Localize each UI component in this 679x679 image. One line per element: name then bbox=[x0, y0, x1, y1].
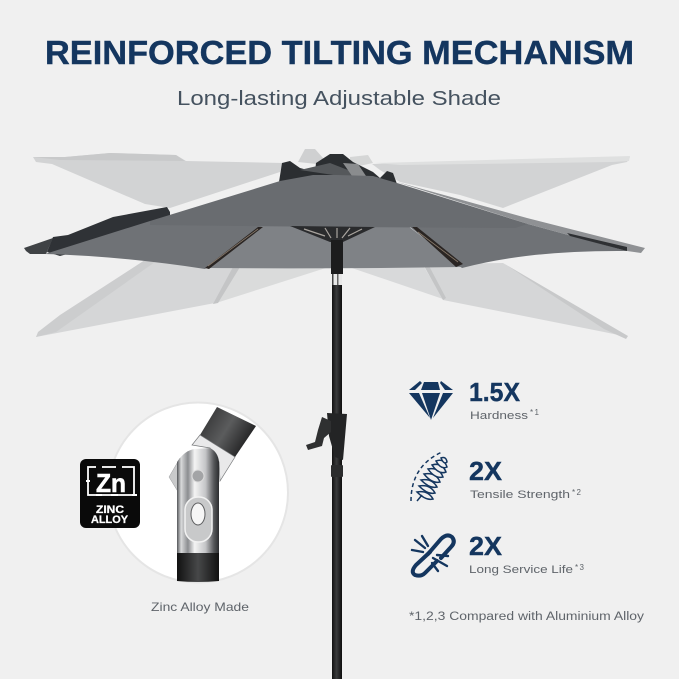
canopy top face bbox=[150, 175, 528, 228]
left panel bbox=[45, 221, 262, 269]
joint upper tube bbox=[200, 407, 256, 457]
stat: long service life: Long Service Life bbox=[469, 564, 573, 576]
stat: hardness bbox=[469, 377, 540, 422]
ghost canopy: tilted up bbox=[33, 149, 630, 208]
underside centre panel bbox=[205, 226, 462, 268]
stat: tensile strength: Tensile Strength bbox=[470, 489, 570, 501]
centre fan bbox=[290, 226, 375, 242]
zinc alloy badge bbox=[80, 459, 140, 528]
left tip bbox=[24, 238, 53, 254]
zinc alloy detail bbox=[108, 402, 288, 582]
stat: long service life bbox=[469, 531, 585, 576]
stat: long service life: *3 bbox=[575, 563, 585, 572]
zinc alloy badge: ZINC bbox=[96, 504, 124, 516]
right panel bbox=[410, 224, 627, 268]
stat: tensile strength: 2X bbox=[469, 456, 503, 486]
stat: hardness: *1 bbox=[530, 408, 540, 417]
joint bracket bbox=[192, 435, 235, 481]
left fabric fold bbox=[47, 207, 170, 256]
detail circle bbox=[108, 402, 288, 582]
ribs bbox=[205, 227, 463, 269]
joint side tab bbox=[169, 458, 180, 495]
tilt crank bbox=[306, 413, 347, 477]
icon: chain link bbox=[412, 535, 454, 576]
chrome joint bbox=[177, 448, 219, 553]
ghost canopy: tilted down bbox=[36, 260, 628, 339]
stat: hardness: Hardness bbox=[470, 410, 529, 422]
subtitle: Long-lasting Adjustable Shade bbox=[177, 88, 501, 110]
zinc alloy badge: ALLOY bbox=[91, 514, 129, 526]
icon: spring bbox=[411, 452, 447, 501]
stat: long service life: 2X bbox=[469, 531, 503, 561]
right edge band bbox=[397, 182, 645, 253]
main canopy bbox=[24, 154, 645, 269]
footnote: *1,2,3 Compared with Aluminium Alloy bbox=[409, 611, 644, 623]
stat: tensile strength: *2 bbox=[572, 488, 582, 497]
umbrella pole bbox=[331, 240, 343, 679]
canopy vent bbox=[279, 154, 397, 184]
zinc alloy badge: Zn bbox=[96, 468, 126, 498]
stat: tensile strength bbox=[469, 456, 582, 501]
icon: diamond bbox=[409, 381, 453, 420]
detail caption: Zinc Alloy Made bbox=[151, 600, 249, 614]
title: REINFORCED TILTING MECHANISM bbox=[45, 34, 634, 71]
stat: hardness: 1.5X bbox=[469, 377, 521, 407]
joint black base bbox=[177, 553, 219, 582]
